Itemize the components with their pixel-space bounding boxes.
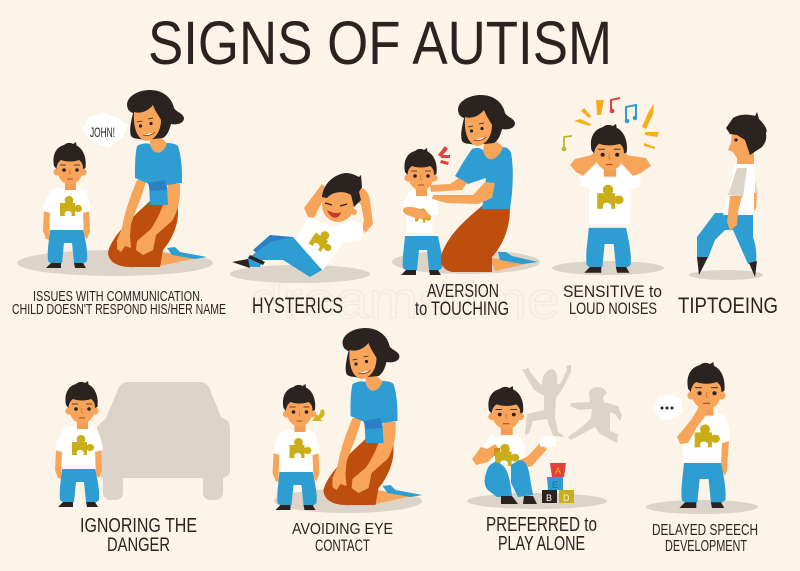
speech bubble: JOHN! <box>90 124 115 140</box>
caption <box>292 521 393 555</box>
caption: CONTACT <box>315 536 370 555</box>
speech bubble <box>82 113 128 147</box>
boy lying back <box>232 173 373 277</box>
ground shadow <box>646 500 758 514</box>
panel: tiptoeing <box>678 112 778 318</box>
alphabet blocks: E <box>552 480 558 490</box>
caption <box>12 289 226 318</box>
caption <box>80 515 197 556</box>
caption <box>652 522 758 555</box>
silhouette: running child <box>568 387 622 443</box>
speech bubble <box>652 394 683 420</box>
mother reaching <box>430 95 538 272</box>
caption: to TOUCHING <box>415 299 509 320</box>
panel: sensitive to loud noises <box>552 98 664 318</box>
boy standing <box>55 381 103 507</box>
caption <box>486 514 597 555</box>
caption: PLAY ALONE <box>498 533 585 555</box>
panel: aversion to touching <box>392 95 540 320</box>
panel: preferred to play alone <box>467 365 622 555</box>
caption: DELAYED SPEECH <box>652 522 758 539</box>
panel: ignoring the danger <box>55 381 230 556</box>
caption: PREFERRED to <box>486 514 597 536</box>
caption: IGNORING THE <box>80 515 197 537</box>
alphabet blocks: D <box>563 493 570 503</box>
silhouette: jumping child <box>522 365 571 437</box>
ground shadow <box>230 265 370 283</box>
boy pulling away <box>401 148 442 275</box>
panel: hysterics <box>230 173 373 318</box>
mother kneeling <box>324 328 422 505</box>
curved arrow <box>312 409 325 421</box>
seated boy <box>472 386 556 504</box>
boy thinking <box>675 362 730 508</box>
alphabet blocks: B <box>546 493 552 503</box>
caption: AVERSION <box>427 281 499 301</box>
caption: CHILD DOESN'T RESPOND HIS/HER NAME <box>12 302 226 318</box>
caption: DANGER <box>107 535 170 556</box>
sound rays <box>574 100 659 149</box>
caption: TIPTOEING <box>678 293 778 318</box>
caption <box>563 282 662 318</box>
caption: LOUD NOISES <box>569 299 657 318</box>
ground shadow <box>467 493 607 509</box>
ground shadow <box>689 270 763 280</box>
alert marks <box>438 146 450 165</box>
mother kneeling <box>108 90 207 267</box>
ground shadow <box>392 250 540 274</box>
ground shadow <box>552 261 664 275</box>
boy standing <box>43 142 91 268</box>
caption <box>415 281 509 320</box>
ground shadow <box>274 489 422 513</box>
caption: HYSTERICS <box>252 293 343 318</box>
car silhouette <box>97 382 230 500</box>
boy covering ears <box>570 124 651 273</box>
watermark: dreamstime <box>250 272 560 330</box>
caption: DEVELOPMENT <box>665 538 747 555</box>
caption: ISSUES WITH COMMUNICATION. <box>33 289 203 305</box>
title: SIGNS OF AUTISM <box>148 9 612 77</box>
caption: AVOIDING EYE <box>292 521 393 538</box>
music notes <box>562 98 637 151</box>
ground shadow <box>17 250 213 276</box>
caption: SENSITIVE to <box>563 282 662 301</box>
alphabet blocks: A <box>555 466 561 476</box>
boy looking away <box>272 384 320 510</box>
boy in profile <box>697 112 767 277</box>
panel: issues with communication <box>12 90 226 318</box>
alphabet blocks <box>542 463 574 503</box>
panel: avoiding eye contact <box>272 328 422 555</box>
panel: delayed speech development <box>646 362 758 555</box>
